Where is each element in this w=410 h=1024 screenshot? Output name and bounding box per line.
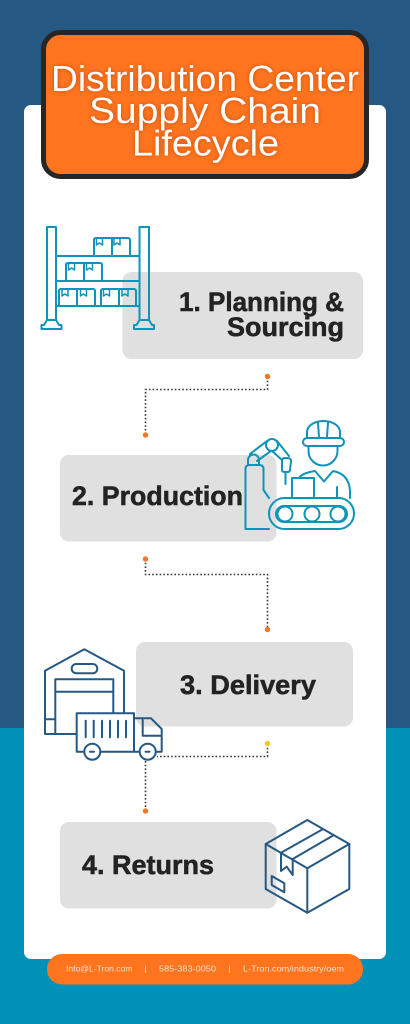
footer contact pill <box>47 954 363 984</box>
step 3 box: Delivery: 3. Delivery <box>180 670 316 700</box>
connector 2 to 3 <box>143 556 270 632</box>
step 2 box: Production <box>60 455 276 542</box>
title text: Lifecycle <box>132 122 279 164</box>
step 1 box: Planning & Sourcing <box>122 272 363 359</box>
connector 3 to 4 <box>143 741 270 814</box>
background: lower teal band <box>0 728 410 1024</box>
title text <box>51 58 359 164</box>
title text: Distribution Center <box>51 58 359 99</box>
footer email: Info@L-Tron.com <box>66 964 132 974</box>
step 1 box: Planning & Sourcing: Sourcing <box>227 312 344 342</box>
background: upper blue band <box>0 0 410 728</box>
icon: warehouse and delivery truck <box>45 649 162 760</box>
footer website: L-Tron.com/industry/oem <box>243 964 344 974</box>
icon: warehouse shelves <box>42 227 154 329</box>
footer separator: | <box>144 964 147 974</box>
icon: cardboard box <box>266 820 349 913</box>
title text: Supply Chain <box>89 90 321 131</box>
footer separator: | <box>228 964 231 974</box>
step 1 box: Planning & Sourcing: 1. Planning & <box>179 287 344 317</box>
step 2 box: Production: 2. Production <box>72 481 243 511</box>
step 4 box: Returns <box>60 822 276 908</box>
icon: worker with robot arm and conveyor <box>246 421 354 529</box>
connector 1 to 2 <box>143 374 270 438</box>
title banner <box>44 32 366 176</box>
panel: white content card <box>24 105 386 959</box>
step 4 box: Returns: 4. Returns <box>82 850 214 880</box>
step 3 box: Delivery <box>136 642 353 726</box>
footer phone: 585-383-0050 <box>159 964 216 974</box>
